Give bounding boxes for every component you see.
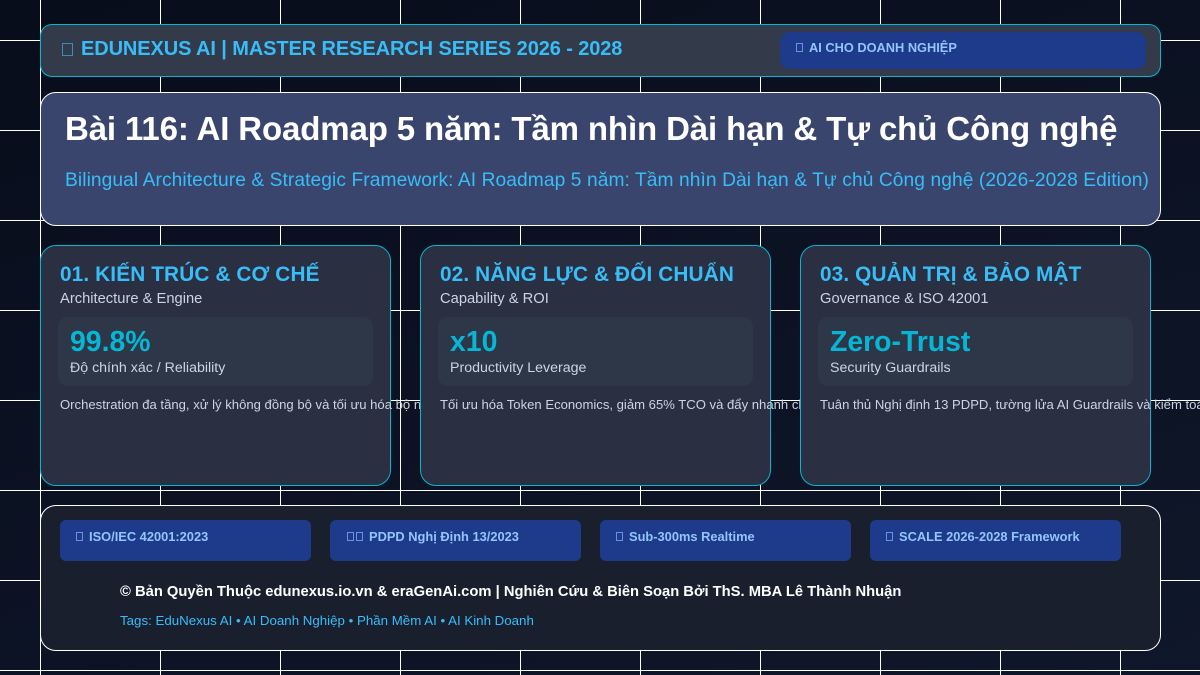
badge: ISO: ISO/IEC 42001:2023 [89,529,208,544]
tags line: Tags: EduNexus AI • AI Doanh Nghiệp • Phần Mềm AI • AI Kinh Doanh [120,613,534,628]
panel: capability card [420,245,771,486]
header bar [40,24,1161,77]
badge: PDPD: PDPD Nghị Định 13/2023 [369,529,519,544]
panel: architecture card [40,245,391,486]
card heading: 03. QUẢN TRỊ & BẢO MẬT [820,263,1081,286]
brand heading: EDUNEXUS AI | MASTER RESEARCH SERIES 2026 - 2028 [81,38,622,60]
card description: Orchestration đa tầng, xử lý không đồng bộ và tối ưu hóa bộ nhớ vector cho hệ thống doanh nghiệp. [60,397,642,412]
metric box: reliability [58,317,373,386]
category badge [780,32,1146,69]
panel: governance card [800,245,1151,486]
card subheading: Architecture & Engine [60,291,202,307]
badge: realtime: Sub-300ms Realtime [629,529,755,544]
badge: PDPD [330,520,581,561]
card subheading: Capability & ROI [440,291,549,307]
title panel [40,92,1161,226]
category badge: AI CHO DOANH NGHIỆP [809,40,957,55]
badge: framework: SCALE 2026-2028 Framework [899,529,1080,544]
card heading: 02. NĂNG LỰC & ĐỐI CHUẨN [440,263,734,286]
card description: Tối ưu hóa Token Economics, giảm 65% TCO và đẩy nhanh chu kỳ triển khai sản phẩm trí tuệ nhân tạo. [440,397,1043,412]
metric value: x10 [450,326,497,358]
metric value: Zero-Trust [830,326,970,358]
metric box: productivity [438,317,753,386]
badge: framework [870,520,1121,561]
metric box: security [818,317,1133,386]
copyright line: © Bản Quyền Thuộc edunexus.io.vn & eraGenAi.com | Nghiên Cứu & Biên Soạn Bởi ThS. MBA Lê Thành Nhuận [120,584,901,600]
card heading: 01. KIẾN TRÚC & CƠ CHẾ [60,263,320,286]
metric label: Độ chính xác / Reliability [70,360,225,376]
main title: Bài 116: AI Roadmap 5 năm: Tầm nhìn Dài hạn & Tự chủ Công nghệ [65,110,1117,147]
metric value: 99.8% [70,326,151,358]
badge: ISO [60,520,311,561]
panel: footer [40,505,1161,651]
subtitle: Bilingual Architecture & Strategic Framework: AI Roadmap 5 năm: Tầm nhìn Dài hạn & Tự chủ Công nghệ (2026-2028 Edition) [65,170,1149,191]
metric label: Security Guardrails [830,360,951,376]
badge: realtime [600,520,851,561]
metric label: Productivity Leverage [450,360,586,376]
card subheading: Governance & ISO 42001 [820,291,989,307]
